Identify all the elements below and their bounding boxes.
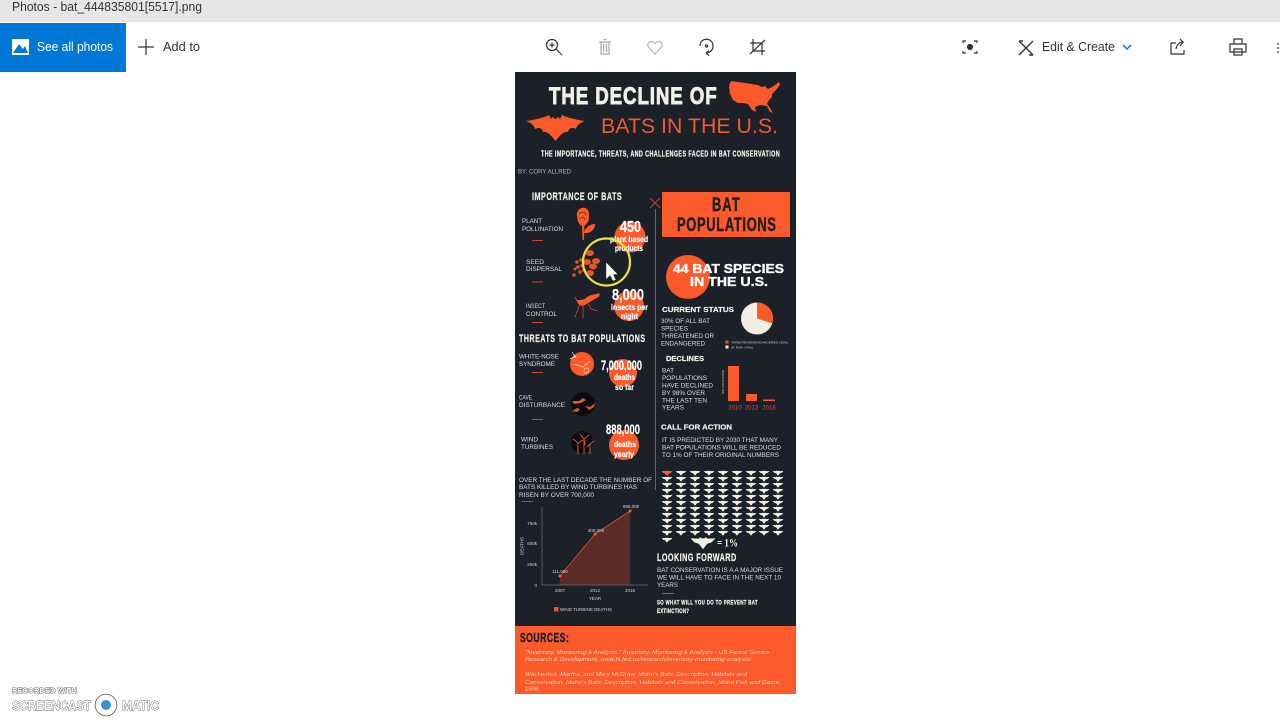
- panel: sources: [515, 626, 796, 694]
- stat: 8,000 insects per night: [611, 287, 649, 321]
- add to button: [138, 39, 200, 55]
- stat: 7,000,000 deaths so far: deaths: [614, 372, 635, 382]
- icon: white-nose fungus: [570, 352, 594, 376]
- item: wind turbines: [521, 436, 554, 451]
- text block: prediction: TO 1% OF THEIR ORIGINAL NUMBERS: [662, 452, 780, 459]
- citations: Conservation. Idaho's Bats: Description, Habitats and Conservation, Idaho Fish and Game,: [525, 680, 781, 686]
- heading: current status: CURRENT STATUS: [662, 307, 734, 314]
- screencast-o-matic watermark: SCREENCAST: [12, 698, 91, 713]
- area chart: wind turbine deaths: [520, 504, 648, 612]
- callout: 44 bat species: IN THE U.S.: [690, 275, 768, 289]
- stat: 7,000,000 deaths so far: [601, 357, 642, 392]
- item: insect control: CONTROL: [526, 311, 557, 318]
- text block: conservation: BAT CONSERVATION IS A A MAJOR ISSUE: [657, 567, 784, 574]
- area chart: wind turbine deaths: WIND TURBINE DEATHS: [560, 607, 612, 612]
- heading: threats to bat populations: THREATS TO BAT POPULATIONS: [519, 332, 645, 344]
- stat: 450 plant based products: [610, 219, 648, 253]
- pictogram key: one bat equals one percent: = 1%: [717, 536, 738, 550]
- text block: declines: [662, 368, 713, 412]
- item: plant pollination: [522, 218, 563, 241]
- text block: wind turbine trend: [519, 477, 652, 502]
- window title bar: [0, 0, 1280, 22]
- text block: conservation: WE WILL HAVE TO FACE IN THE NEXT 10: [657, 574, 781, 582]
- icon: seeds: [572, 250, 600, 277]
- item: wind turbines: WIND: [521, 436, 538, 444]
- item: white-nose syndrome: WHITE-NOSE: [519, 354, 560, 360]
- edit and create menu: Edit & Create: [1042, 39, 1115, 54]
- pie chart legend: AT RISK (70%): [731, 346, 753, 350]
- callout: 44 bat species: 44 BAT SPECIES: [673, 262, 784, 276]
- text block: status: SPECIES: [661, 326, 689, 332]
- text block: prediction: BAT POPULATIONS WILL BE REDUCED: [662, 444, 781, 452]
- stat: 7,000,000 deaths so far: 7,000,000: [601, 357, 642, 373]
- pie chart legend: [726, 340, 788, 350]
- bar chart: bat population: 2010: [728, 406, 742, 412]
- item: white-nose syndrome: [519, 354, 560, 373]
- text block: declines: BAT: [662, 368, 674, 374]
- citations: "Inventory, Monitoring & Analysis." Inventory, Monitoring & Analysis - US Forest Service: [525, 650, 771, 656]
- area chart: wind turbine deaths: 2007: [555, 588, 566, 593]
- panel: bat populations banner: POPULATIONS: [677, 213, 776, 236]
- citations: Research & Development, www.fs.fed.us/research/inventory-monitoring-analysis/.: [525, 657, 753, 663]
- area chart: wind turbine deaths: 2012: [590, 588, 601, 593]
- area chart: wind turbine deaths: YEAR: [589, 596, 602, 601]
- stat: 8,000 insects per night: insects per: [611, 302, 649, 312]
- see all photos button: See all photos: [37, 39, 113, 54]
- stat: 888,000 deaths yearly: deaths: [614, 439, 636, 449]
- mouse cursor: [606, 262, 618, 281]
- text block: status: 30% OF ALL BAT: [661, 318, 710, 325]
- stat: 450 plant based products: 450: [620, 219, 641, 236]
- text block: wind turbine trend: OVER THE LAST DECADE THE NUMBER OF: [519, 477, 652, 484]
- pictogram: one hundred bats: [662, 470, 783, 543]
- bar chart: bat population: 2013: [745, 406, 759, 412]
- panel: bat populations banner: [662, 192, 790, 237]
- text block: status: ENDANGERED: [661, 340, 705, 348]
- pie chart: threatened share: [741, 302, 773, 334]
- text block: conservation: [657, 567, 784, 594]
- icon: cave bats: [571, 392, 595, 416]
- heading: looking forward: LOOKING FORWARD: [657, 552, 736, 563]
- call to action question: SO WHAT WILL YOU DO TO PREVENT BAT: [657, 600, 758, 607]
- call to action question: EXTINCTION?: [657, 608, 689, 615]
- item: plant pollination: PLANT: [522, 218, 542, 225]
- subtitle: THE IMPORTANCE, THREATS, AND CHALLENGES FACED IN BAT CONSERVATION: [541, 151, 780, 159]
- area chart: wind turbine deaths: 500k: [527, 541, 538, 546]
- add to button: Add to: [163, 39, 200, 54]
- panel: importance of bats: [522, 191, 649, 323]
- stat: 450 plant based products: plant based: [610, 234, 648, 244]
- text block: declines: THE LAST TEN: [662, 398, 707, 404]
- text block: declines: YEARS: [662, 404, 685, 412]
- text block: conservation: YEARS: [657, 582, 679, 589]
- item: insect control: [526, 303, 557, 323]
- area chart: wind turbine deaths: 2018: [625, 588, 636, 593]
- heading: declines: DECLINES: [666, 356, 704, 363]
- item: seed dispersal: [526, 259, 562, 282]
- panel: current status: [661, 302, 788, 350]
- panel: bat populations banner: BAT: [712, 193, 740, 216]
- center divider with x mark: [650, 198, 660, 490]
- infographic poster: [515, 72, 796, 694]
- item: plant pollination: POLLINATION: [522, 226, 563, 233]
- text block: prediction: IT IS PREDICTED BY 2030 THAT MANY: [662, 437, 779, 444]
- bar chart: bat population: [721, 366, 776, 412]
- icon: rose: [577, 208, 595, 240]
- area chart: wind turbine deaths: 0: [534, 583, 537, 588]
- panel: threats to bat populations: [519, 332, 652, 502]
- area chart: wind turbine deaths: 888,000: [623, 504, 640, 509]
- text block: prediction: [662, 437, 781, 459]
- area chart: wind turbine deaths: 750k: [527, 521, 538, 526]
- area chart: wind turbine deaths: DEATHS: [520, 537, 524, 555]
- icon: bat silhouette: [526, 115, 585, 141]
- stat: 7,000,000 deaths so far: so far: [615, 382, 635, 392]
- item: seed dispersal: DISPERSAL: [526, 266, 562, 273]
- heading: sources: SOURCES:: [520, 631, 569, 646]
- panel: looking forward: [657, 552, 784, 615]
- pie chart legend: THREATENED/ENDANGERED (30%): [731, 340, 788, 344]
- screencast-o-matic watermark: [12, 686, 160, 716]
- screencast-o-matic watermark: RECORDED WITH: [12, 686, 77, 695]
- citations: 1998.: [525, 686, 540, 692]
- byline: BY: CORY ALLRED: [518, 170, 572, 176]
- text block: status: THREATENED OR: [661, 333, 714, 340]
- stat: 450 plant based products: products: [615, 243, 643, 253]
- bar chart: bat population: 2018: [762, 406, 776, 412]
- see all photos button: [0, 23, 126, 72]
- text block: wind turbine trend: RISEN BY OVER 700,000: [519, 492, 594, 499]
- item: cave disturbance: DISTURBANCE: [519, 402, 566, 409]
- area chart: wind turbine deaths: 400,000: [588, 528, 605, 533]
- text block: declines: POPULATIONS: [662, 375, 708, 382]
- title line two: BATS IN THE U.S.: [601, 115, 778, 138]
- stat: 8,000 insects per night: night: [621, 311, 638, 321]
- callout: 44 bat species: [666, 255, 784, 299]
- item: cave disturbance: CAVE: [519, 394, 532, 402]
- stat: 888,000 deaths yearly: 888,000: [606, 422, 640, 437]
- item: insect control: INSECT: [526, 303, 545, 310]
- area chart: wind turbine deaths: 111,000: [552, 569, 568, 574]
- item: white-nose syndrome: SYNDROME: [519, 361, 556, 368]
- citations: [525, 650, 781, 692]
- panel: call for action: [661, 424, 783, 550]
- bar chart: bat population: BAT POPULATION: [721, 370, 725, 394]
- heading: call for action: CALL FOR ACTION: [661, 424, 732, 432]
- stat: 888,000 deaths yearly: [606, 422, 640, 460]
- yellow cursor highlight: [583, 238, 630, 286]
- item: wind turbines: TURBINES: [521, 444, 554, 451]
- text block: wind turbine trend: BATS KILLED BY WIND TURBINES HAS: [519, 484, 638, 491]
- text block: declines: BY 98% OVER: [662, 390, 705, 397]
- icon: wind turbines: [571, 431, 594, 454]
- stat: 8,000 insects per night: 8,000: [612, 287, 644, 304]
- panel: declines: [662, 356, 776, 412]
- text block: declines: HAVE DECLINED: [662, 382, 713, 390]
- call to action question: [657, 600, 758, 615]
- icon: map of the U.S.: [729, 81, 780, 113]
- item: seed dispersal: SEED: [526, 259, 544, 266]
- area chart: wind turbine deaths: 250k: [527, 562, 538, 567]
- screencast-o-matic watermark: MATIC: [122, 698, 160, 713]
- title line one: THE DECLINE OF: [549, 83, 717, 110]
- item: cave disturbance: [519, 394, 566, 420]
- stat: 888,000 deaths yearly: yearly: [614, 449, 634, 459]
- icon: mosquito: [575, 293, 600, 318]
- heading: importance of bats: IMPORTANCE OF BATS: [532, 191, 622, 202]
- text block: status: [661, 318, 714, 348]
- citations: Wackenhut, Martha, and Mary McGraw. Idaho's Bats: Description, Habitats and: [525, 672, 748, 678]
- toolbar icons: [546, 39, 1278, 56]
